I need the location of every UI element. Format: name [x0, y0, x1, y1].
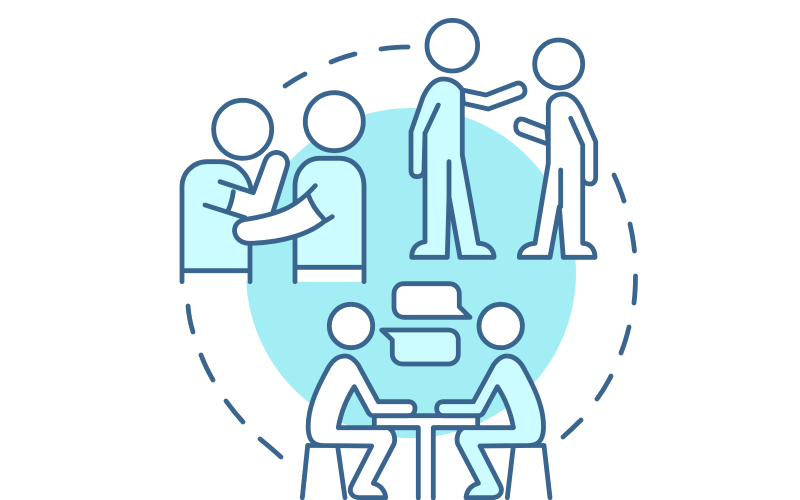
left standing person inner lines: [425, 105, 449, 197]
right standing person: [519, 94, 596, 257]
speech bubble: cyan: [382, 330, 458, 364]
seated people heads: [329, 304, 522, 348]
left hugging person body: [182, 162, 252, 282]
group: two people at table: [302, 284, 550, 500]
left seated person: [308, 356, 415, 498]
right hugging person body: [295, 158, 364, 282]
stool seats and table legs: [308, 428, 544, 498]
standing people heads: [427, 20, 583, 88]
right seated person: [437, 356, 544, 498]
right person's hugging arm: [234, 186, 332, 243]
background circle: [246, 108, 576, 438]
pointing arm: [462, 83, 525, 109]
dashed ring: [188, 47, 636, 457]
reaching arm: [516, 119, 548, 144]
group: two people hugging: [182, 93, 364, 282]
left person's raised arm: [205, 152, 288, 218]
left standing person: [411, 79, 494, 257]
table top: [374, 416, 478, 428]
speech bubble: white: [394, 284, 470, 317]
stools: [302, 446, 550, 498]
table column: [418, 425, 433, 500]
group: two people standing: [411, 20, 596, 257]
right standing person inner lines: [561, 118, 583, 207]
hugging people heads: [214, 93, 363, 158]
